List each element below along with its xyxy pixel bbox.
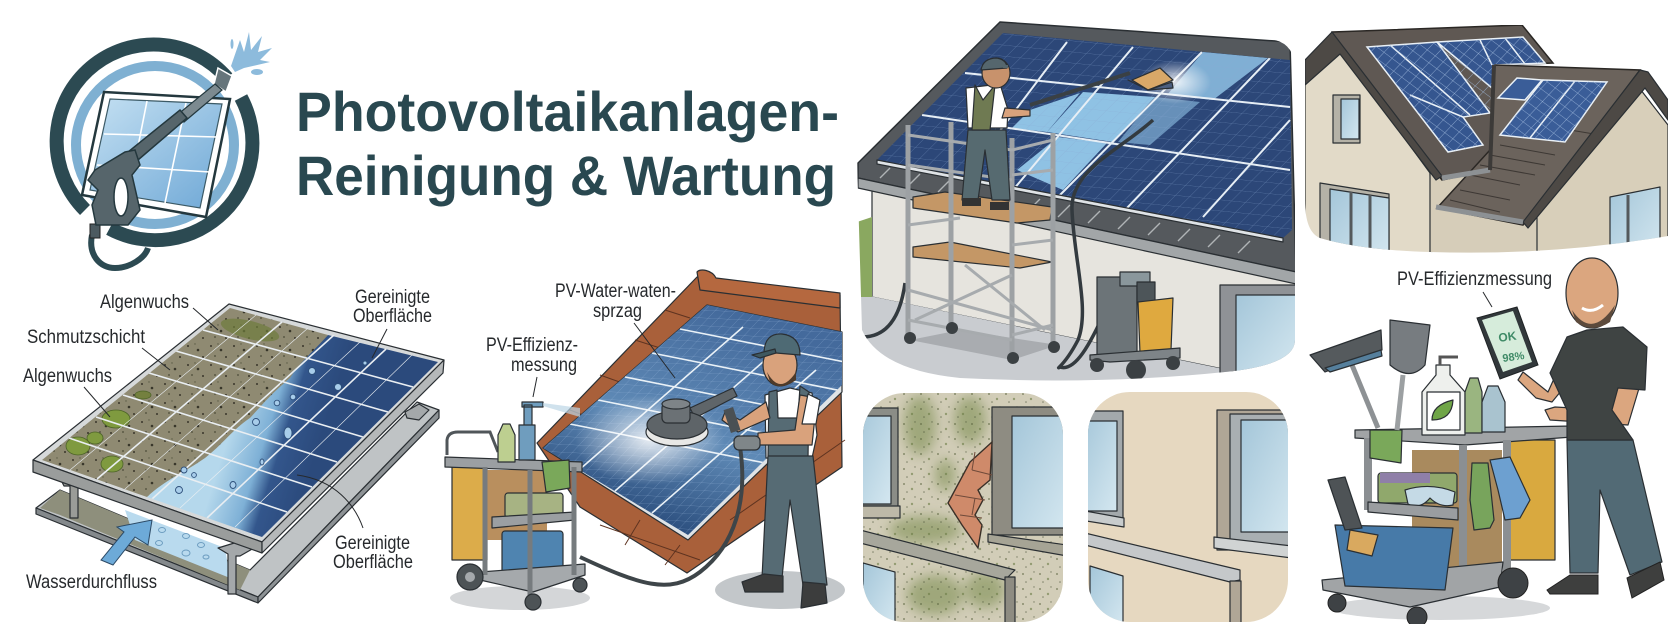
- cell grid lines: [69, 315, 413, 527]
- panel: worker cleaning roof panel with rotating brush: [445, 270, 880, 610]
- window: [1220, 285, 1296, 375]
- wall: [871, 192, 1295, 372]
- algae patches: [66, 314, 281, 472]
- cleaning bottles: [1422, 357, 1505, 435]
- ledge: [860, 530, 1015, 580]
- valley: [1490, 65, 1494, 170]
- floor shadow: [1330, 596, 1550, 620]
- safety goggles: [1405, 486, 1455, 506]
- label: Algenwuchs top: Algenwuchs: [100, 292, 189, 313]
- shovel: [1390, 320, 1430, 430]
- logo solar panel: [82, 92, 230, 217]
- rotating brush: [646, 388, 737, 446]
- door post: [1005, 577, 1015, 624]
- title line 1: Photovoltaikanlagen-: [296, 80, 839, 143]
- label: Algenwuchs left: Algenwuchs: [23, 366, 112, 387]
- rear roof: [1332, 25, 1553, 180]
- label: PV-Effizienzmessung: PV-Effizienzmessung: [1397, 269, 1552, 290]
- door post: [1230, 581, 1241, 624]
- hose up the roof: [1059, 120, 1153, 368]
- gutter: [858, 178, 1296, 284]
- lower window: [1090, 566, 1123, 624]
- lower right window: [1609, 186, 1661, 244]
- rear solar panels: [1367, 37, 1545, 152]
- broom: [1310, 330, 1382, 428]
- title: [296, 80, 839, 207]
- panel: clean renovated facade: [1080, 392, 1292, 624]
- right window: [988, 407, 1067, 556]
- cleaned surface: [147, 335, 438, 537]
- trolley back: [1412, 450, 1502, 575]
- cleaning cart: [445, 402, 590, 610]
- left window: [863, 407, 901, 519]
- panel frame: [33, 304, 444, 553]
- centre wall: [1429, 173, 1540, 253]
- lower mounting rail: [36, 402, 439, 603]
- worker: [715, 334, 845, 609]
- logo spray gun: [88, 68, 232, 268]
- technician shirt: [1550, 327, 1647, 440]
- left window: [1080, 411, 1124, 527]
- bucket: [1335, 525, 1453, 590]
- scraper: [1328, 477, 1362, 530]
- label: PV-Water-waten-sprzag: sprzag: [593, 301, 642, 322]
- tray droplets: [156, 528, 209, 559]
- label: Gereinigte Oberfläche top: Oberfläche: [353, 306, 432, 327]
- water flow arrow: [101, 520, 152, 565]
- technician head: [1566, 258, 1618, 328]
- label: Gereinigte Oberfläche top: Gereinigte: [355, 287, 430, 308]
- solar panel on roof: [542, 304, 843, 541]
- tablet with efficiency reading: [1477, 307, 1538, 379]
- leader line: [1483, 292, 1492, 307]
- bush: [857, 217, 872, 297]
- label: Wasserdurchfluss: Wasserdurchfluss: [26, 572, 157, 593]
- right gable wall: [1537, 85, 1668, 260]
- green algae streaks: [889, 395, 1005, 615]
- tablet with efficiency reading: 98%: [1502, 350, 1525, 365]
- roof ribs: [880, 168, 1250, 253]
- dirty surface: [42, 308, 328, 497]
- upper left window: [1333, 95, 1360, 143]
- right barge board: [1523, 70, 1668, 228]
- ledge: [1085, 533, 1240, 582]
- solar array: [870, 28, 1300, 243]
- lower left window: [1320, 183, 1389, 260]
- front roof: [1437, 65, 1640, 225]
- logo water spray: [230, 32, 272, 75]
- panel: house with roof solar panels: [1305, 25, 1668, 260]
- wheels: [1328, 568, 1528, 624]
- pole and brush: [1030, 68, 1173, 105]
- hose: [580, 447, 742, 585]
- pressure machine: [1090, 272, 1180, 380]
- trolley bag: [1510, 440, 1555, 560]
- technician shoes: [1547, 562, 1664, 598]
- bucket sponge: [1347, 530, 1378, 556]
- label: Gereinigte Oberfläche bottom: Gereinigte: [335, 533, 410, 554]
- panel: technician with cleaning trolley: [1310, 258, 1664, 624]
- title line 2: Reinigung & Wartung: [296, 144, 836, 207]
- label: Schmutzschicht: Schmutzschicht: [27, 327, 146, 348]
- green cloth: [1370, 430, 1402, 463]
- roof and eaves: [858, 22, 1296, 272]
- exposed brick: [948, 442, 992, 548]
- right window: [1214, 410, 1292, 558]
- label: Gereinigte Oberfläche bottom: Oberfläche: [333, 552, 413, 573]
- cleaned cells: [1012, 52, 1268, 190]
- scaffold: [904, 122, 1060, 364]
- leader lines: [84, 308, 387, 528]
- panel: worker on scaffold cleaning roof array: [855, 22, 1300, 390]
- gloves: [1470, 457, 1530, 530]
- panel: cross-section of soiled and cleaned solar module: [23, 287, 444, 603]
- water droplets: [176, 361, 367, 494]
- tiled roof: [537, 270, 845, 573]
- left barge board: [1305, 32, 1442, 180]
- technician arms: [1518, 372, 1640, 425]
- label: PV-Effizienz-messung: messung: [511, 355, 577, 376]
- left hose: [862, 283, 905, 337]
- worker on scaffold: [962, 58, 1030, 210]
- shadow under scaffold: [915, 331, 1049, 359]
- lower window: [863, 563, 895, 624]
- logo outer ring: [57, 44, 252, 240]
- logo: pressure washer and solar panel: [57, 32, 272, 268]
- front solar panels: [1498, 78, 1607, 142]
- label: PV-Water-waten-sprzag: PV-Water-waten-: [555, 281, 676, 302]
- trolley frame: [1322, 426, 1572, 607]
- stored towels: [1378, 473, 1457, 503]
- leader lines: [533, 323, 675, 397]
- panel: mouldy facade with exposed brick: [855, 393, 1067, 624]
- gutters: [1436, 170, 1523, 222]
- left gable wall: [1305, 50, 1432, 260]
- technician legs: [1567, 440, 1662, 575]
- label: PV-Effizienz-messung: PV-Effizienz-: [486, 335, 578, 356]
- ground: [861, 296, 1232, 380]
- tablet with efficiency reading: OK: [1497, 329, 1518, 345]
- logo light blue ring: [76, 66, 234, 224]
